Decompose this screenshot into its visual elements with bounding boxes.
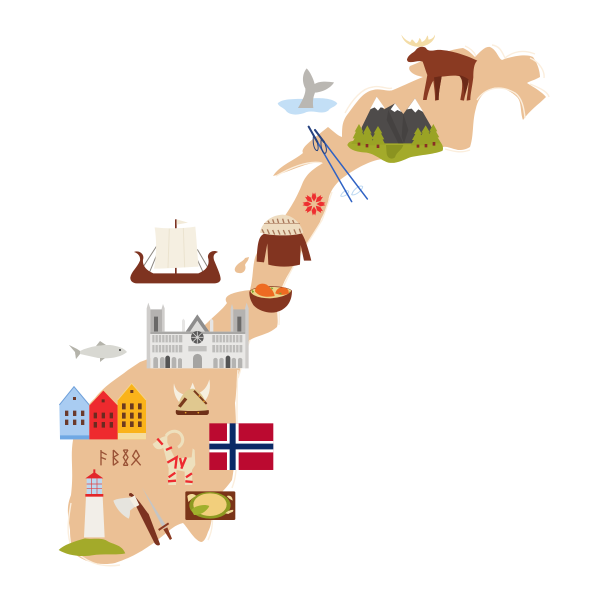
icon: Norwegian sweater bbox=[257, 215, 311, 267]
grass base bbox=[347, 140, 443, 163]
icon: Nidaros cathedral bbox=[147, 303, 249, 368]
icon: sword bbox=[142, 487, 172, 540]
grassy hill bbox=[59, 538, 125, 556]
icon: mountains with forest bbox=[347, 97, 443, 163]
icon: Norwegian flag bbox=[209, 423, 273, 470]
icon: fish dish bbox=[185, 491, 235, 520]
icon: runes bbox=[101, 450, 141, 465]
yellow house bbox=[118, 383, 146, 439]
blue house bbox=[59, 387, 89, 439]
icon: Viking ship bbox=[130, 219, 221, 283]
small island bbox=[235, 257, 249, 273]
map of Norway bbox=[68, 45, 549, 566]
icon: axe bbox=[113, 493, 160, 545]
cream coastline offset bbox=[68, 45, 549, 566]
icon: lighthouse bbox=[59, 469, 125, 556]
icon: salmon bowl bbox=[249, 284, 292, 313]
icon: whale tail in water bbox=[278, 68, 337, 115]
icon: Viking helmet bbox=[174, 379, 210, 415]
icon: moose bbox=[401, 35, 477, 101]
red house bbox=[89, 390, 118, 439]
icon: knit snowflake bbox=[302, 192, 326, 216]
icon: Yule goat bbox=[153, 431, 195, 485]
icon: fish bbox=[69, 341, 127, 362]
icon: skis and poles bbox=[309, 127, 367, 202]
icon: Bryggen houses bbox=[59, 383, 146, 439]
